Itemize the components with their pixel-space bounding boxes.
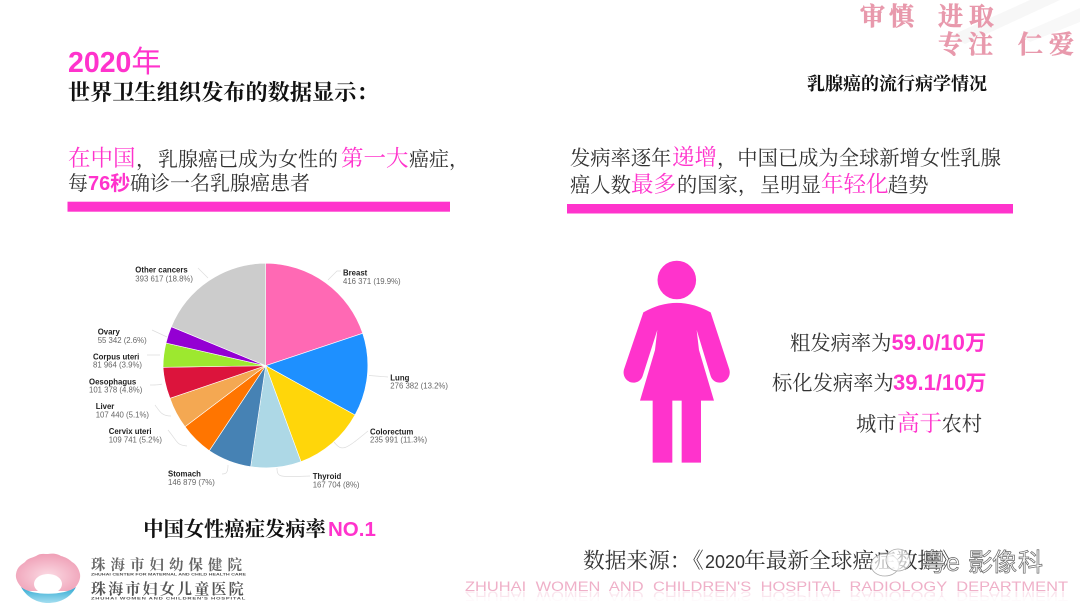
panel: global trend text: 呈明显 (760, 174, 821, 197)
motto: top right calligraphy: 进取 (938, 3, 994, 31)
department banner with reflection (460, 579, 1080, 605)
stat: crude incidence: 粗发病率为 (790, 332, 891, 355)
label: ovary: Ovary (98, 327, 120, 336)
motto: top right calligraphy: 专注 (938, 31, 993, 59)
icon: chat bubble (871, 549, 910, 576)
panel: global trend text: 最多 (631, 172, 676, 197)
hospital logo (16, 554, 246, 603)
data source: 数据来源： (583, 548, 691, 573)
label: thyroid: 167 704 (8%) (313, 480, 360, 489)
data source: 年最新全球癌症数据》 (744, 548, 961, 573)
stat: crude incidence: 万 (965, 332, 986, 355)
stat: standardized incidence: 标化发病率为 (772, 372, 894, 395)
panel: China summary text (68, 146, 469, 195)
motto: top right calligraphy (860, 3, 1074, 59)
section title: epidemiology: 乳腺癌的流行病学情况 (807, 73, 987, 94)
label: oesophagus: 101 378 (4.8%) (89, 386, 143, 395)
heading: year: 2020年 (68, 46, 161, 79)
divider bar: right (567, 204, 1013, 214)
label: corpus uteri: 81 964 (3.9%) (93, 361, 142, 370)
label: ovary: 55 342 (2.6%) (98, 336, 147, 345)
logo text: hospital name: 珠海市妇女儿童医院 (91, 580, 244, 598)
label: oesophagus: Oesophagus (89, 377, 137, 386)
panel: China summary text: 癌症， (409, 148, 469, 171)
panel: global trend text: 癌人数 (570, 174, 631, 197)
chart caption: 中国女性癌症发病率 (143, 519, 326, 541)
stat: urban vs rural: 农村 (942, 413, 982, 436)
pie chart: cancer incidence (89, 263, 448, 489)
logo text: center English name: ZHUHAI CENTER FOR MATERNAL AND CHILD HEALTH CARE (91, 572, 246, 576)
slice: lung (266, 333, 368, 415)
panel: China summary text: 第一大 (341, 146, 409, 171)
label: other cancers: Other cancers (135, 266, 188, 275)
panel: global trend text: 递增 (672, 145, 717, 170)
stat: standardized incidence: 万 (966, 372, 986, 395)
slice: other cancers (171, 263, 266, 366)
label: cervix uteri: Cervix uteri (109, 427, 152, 436)
label: liver: 107 440 (5.1%) (96, 411, 149, 420)
logo text: hospital English name: ZHUHAI WOMEN AND CHILDREN'S HOSPITAL (91, 596, 246, 600)
label: stomach: Stomach (168, 470, 201, 479)
department banner with reflection: ZHUHAI WOMEN AND CHILDREN'S HOSPITAL RADIOLOGY DEPARTMENT (465, 579, 1068, 594)
panel: global trend text: 的国家， (677, 174, 758, 197)
data source: 2020 (705, 552, 745, 572)
panel: global trend text: ，中国已成为全球新增女性乳腺 (717, 147, 1001, 170)
label: colorectum: Colorectum (370, 427, 413, 436)
motto: top right calligraphy: 审慎 (860, 3, 917, 31)
icon: shell emblem (16, 554, 80, 603)
watermark text: 粤e影像科 (921, 549, 1043, 577)
slice: thyroid (251, 366, 301, 468)
label: breast: Breast (343, 268, 368, 277)
slice: cervix uteri (185, 366, 266, 451)
slice: oesophagus (163, 366, 266, 398)
department banner with reflection: ZHUHAI WOMEN AND CHILDREN'S HOSPITAL RADIOLOGY DEPARTMENT (465, 588, 1068, 604)
label: corpus uteri: Corpus uteri (93, 352, 139, 361)
panel: global trend text: 趋势 (888, 174, 929, 197)
stat: crude incidence: 59.0/10 (892, 330, 965, 355)
label: colorectum: 235 991 (11.3%) (370, 436, 427, 445)
stat: urban vs rural: 城市 (856, 413, 897, 436)
slice: colorectum (266, 366, 355, 462)
label: other cancers: 393 617 (18.8%) (135, 275, 193, 284)
motto: top right calligraphy: 仁爱 (1018, 31, 1074, 59)
data source: 《 (682, 548, 704, 573)
wechat watermark (871, 549, 1043, 577)
slice: ovary (166, 327, 266, 366)
chart caption: NO.1 (328, 518, 376, 541)
slice: liver (170, 366, 266, 427)
panel: China summary text: 每 (68, 172, 88, 195)
stat: urban vs rural: 高于 (897, 411, 942, 436)
label: thyroid: Thyroid (313, 472, 342, 481)
panel: China summary text: 在中国 (68, 146, 136, 171)
label: stomach: 146 879 (7%) (168, 478, 215, 487)
logo text: center name: 珠海市妇幼保健院 (91, 556, 242, 574)
panel: global trend text: 年轻化 (821, 172, 889, 197)
label: liver: Liver (96, 402, 114, 411)
slice: corpus uteri (163, 343, 266, 367)
panel: China summary text: 76秒 (88, 172, 130, 195)
slice: stomach (209, 366, 266, 467)
heading: WHO data statement: 世界卫生组织发布的数据显示： (68, 80, 379, 105)
divider bar: left (68, 202, 450, 212)
label: lung: 276 382 (13.2%) (390, 382, 448, 391)
label: lung: Lung (390, 373, 410, 382)
panel: China summary text: 确诊一名乳腺癌患者 (130, 172, 310, 195)
panel: China summary text: 乳腺癌已成为女性的 (158, 148, 338, 171)
label: breast: 416 371 (19.9%) (343, 277, 401, 286)
icon: woman figure (624, 261, 730, 463)
panel: global trend text: 发病率逐年 (570, 147, 671, 170)
label: cervix uteri: 109 741 (5.2%) (109, 436, 162, 445)
panel: global trend text (570, 145, 1001, 197)
panel: China summary text: ， (136, 149, 156, 171)
stat: standardized incidence: 39.1/10 (893, 370, 966, 395)
slice: breast (266, 263, 363, 366)
